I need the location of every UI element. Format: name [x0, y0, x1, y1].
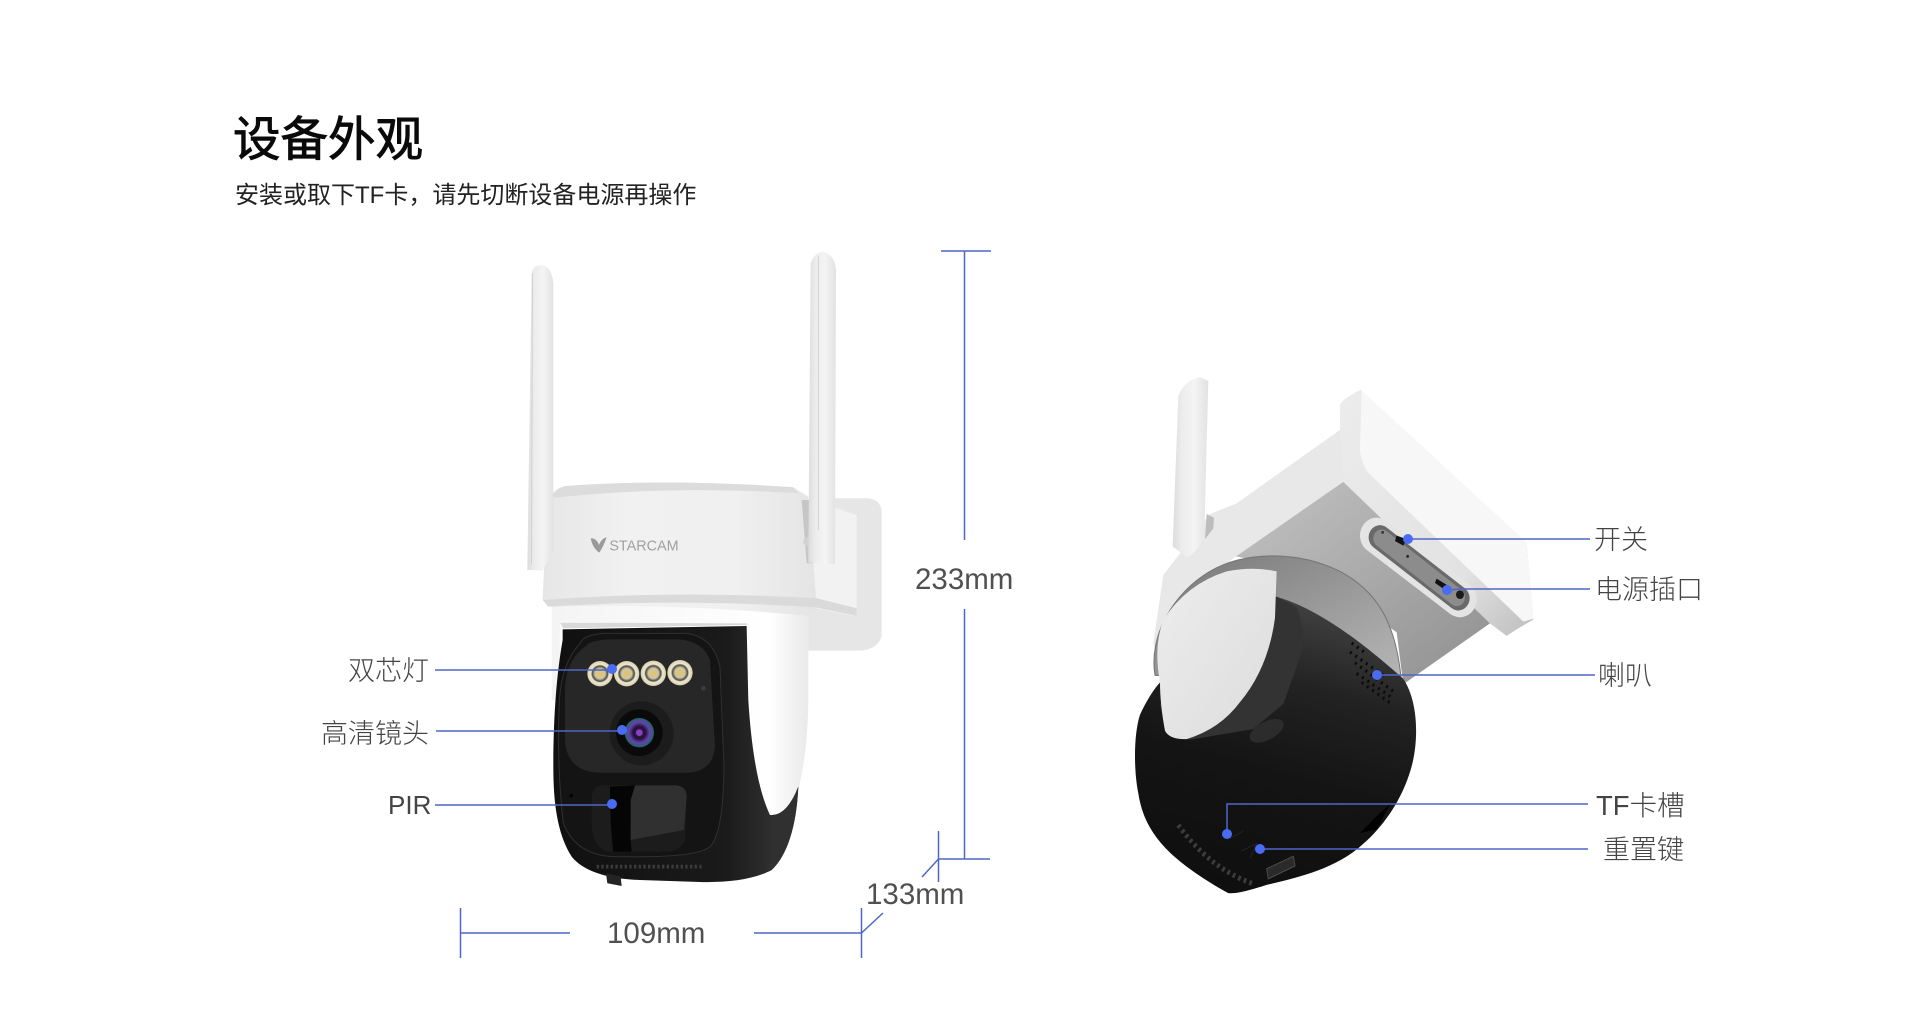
antenna — [1173, 377, 1208, 557]
callout: TF slot: TF卡槽 — [1596, 790, 1685, 821]
camera: rear side view — [1135, 377, 1533, 893]
callout: speaker: 喇叭 — [1598, 661, 1652, 691]
side recess — [1246, 714, 1287, 748]
bottom tab — [606, 873, 622, 886]
callout: dual-core light — [348, 656, 617, 686]
dimension: width 109mm: 109mm — [607, 917, 705, 950]
callout: HD lens — [321, 719, 627, 749]
callout: HD lens: 高清镜头 — [321, 719, 429, 749]
callout: power port — [1442, 575, 1703, 605]
callout: TF slot — [1222, 790, 1685, 839]
LED lights — [587, 661, 613, 686]
housing and antennas: STARCAM — [609, 539, 679, 555]
callout: reset key — [1255, 835, 1684, 865]
vents — [597, 861, 702, 872]
callout: power port: 电源插口 — [1595, 575, 1703, 605]
right antenna — [808, 252, 836, 564]
dimension: depth 133mm — [862, 831, 964, 933]
dimension: depth 133mm: 133mm — [866, 878, 964, 911]
speaker holes — [1350, 643, 1393, 704]
wall mount back plate — [808, 498, 882, 651]
usb cover — [1267, 856, 1295, 879]
lens — [610, 701, 674, 765]
callout: PIR — [388, 790, 617, 820]
callouts: left — [321, 656, 627, 820]
switch and power ports — [1395, 536, 1407, 546]
plate face — [1360, 390, 1533, 622]
subtitle: 安装或取下TF卡，请先切断设备电源再操作 — [235, 182, 696, 209]
title: 设备外观 — [233, 114, 423, 167]
callout: dual-core light: 双芯灯 — [348, 656, 429, 686]
gray ring — [1154, 556, 1402, 684]
dimension: width 109mm — [460, 908, 862, 958]
mount plate — [1340, 390, 1533, 636]
logo — [591, 537, 607, 553]
PIR sensor — [592, 785, 687, 852]
arm — [1153, 430, 1343, 677]
bottom vents — [1178, 825, 1253, 884]
callout: switch — [1403, 525, 1648, 555]
dimension: height 233mm — [915, 251, 1013, 859]
callout: reset key: 重置键 — [1603, 835, 1684, 865]
black ball — [1135, 596, 1416, 893]
port panel — [1377, 536, 1460, 599]
callout: speaker — [1372, 661, 1652, 691]
callout: PIR: PIR — [388, 790, 431, 820]
dimension: height 233mm: 233mm — [915, 563, 1013, 596]
camera: front view — [527, 252, 882, 886]
black camera head — [553, 626, 798, 886]
slots — [1230, 831, 1257, 858]
callout: switch: 开关 — [1594, 525, 1648, 555]
underside — [1230, 482, 1490, 684]
white side blob — [1157, 569, 1277, 739]
left antenna — [527, 265, 553, 571]
housing and antennas — [527, 252, 857, 616]
callouts: right — [1222, 525, 1703, 865]
white body — [552, 597, 808, 817]
